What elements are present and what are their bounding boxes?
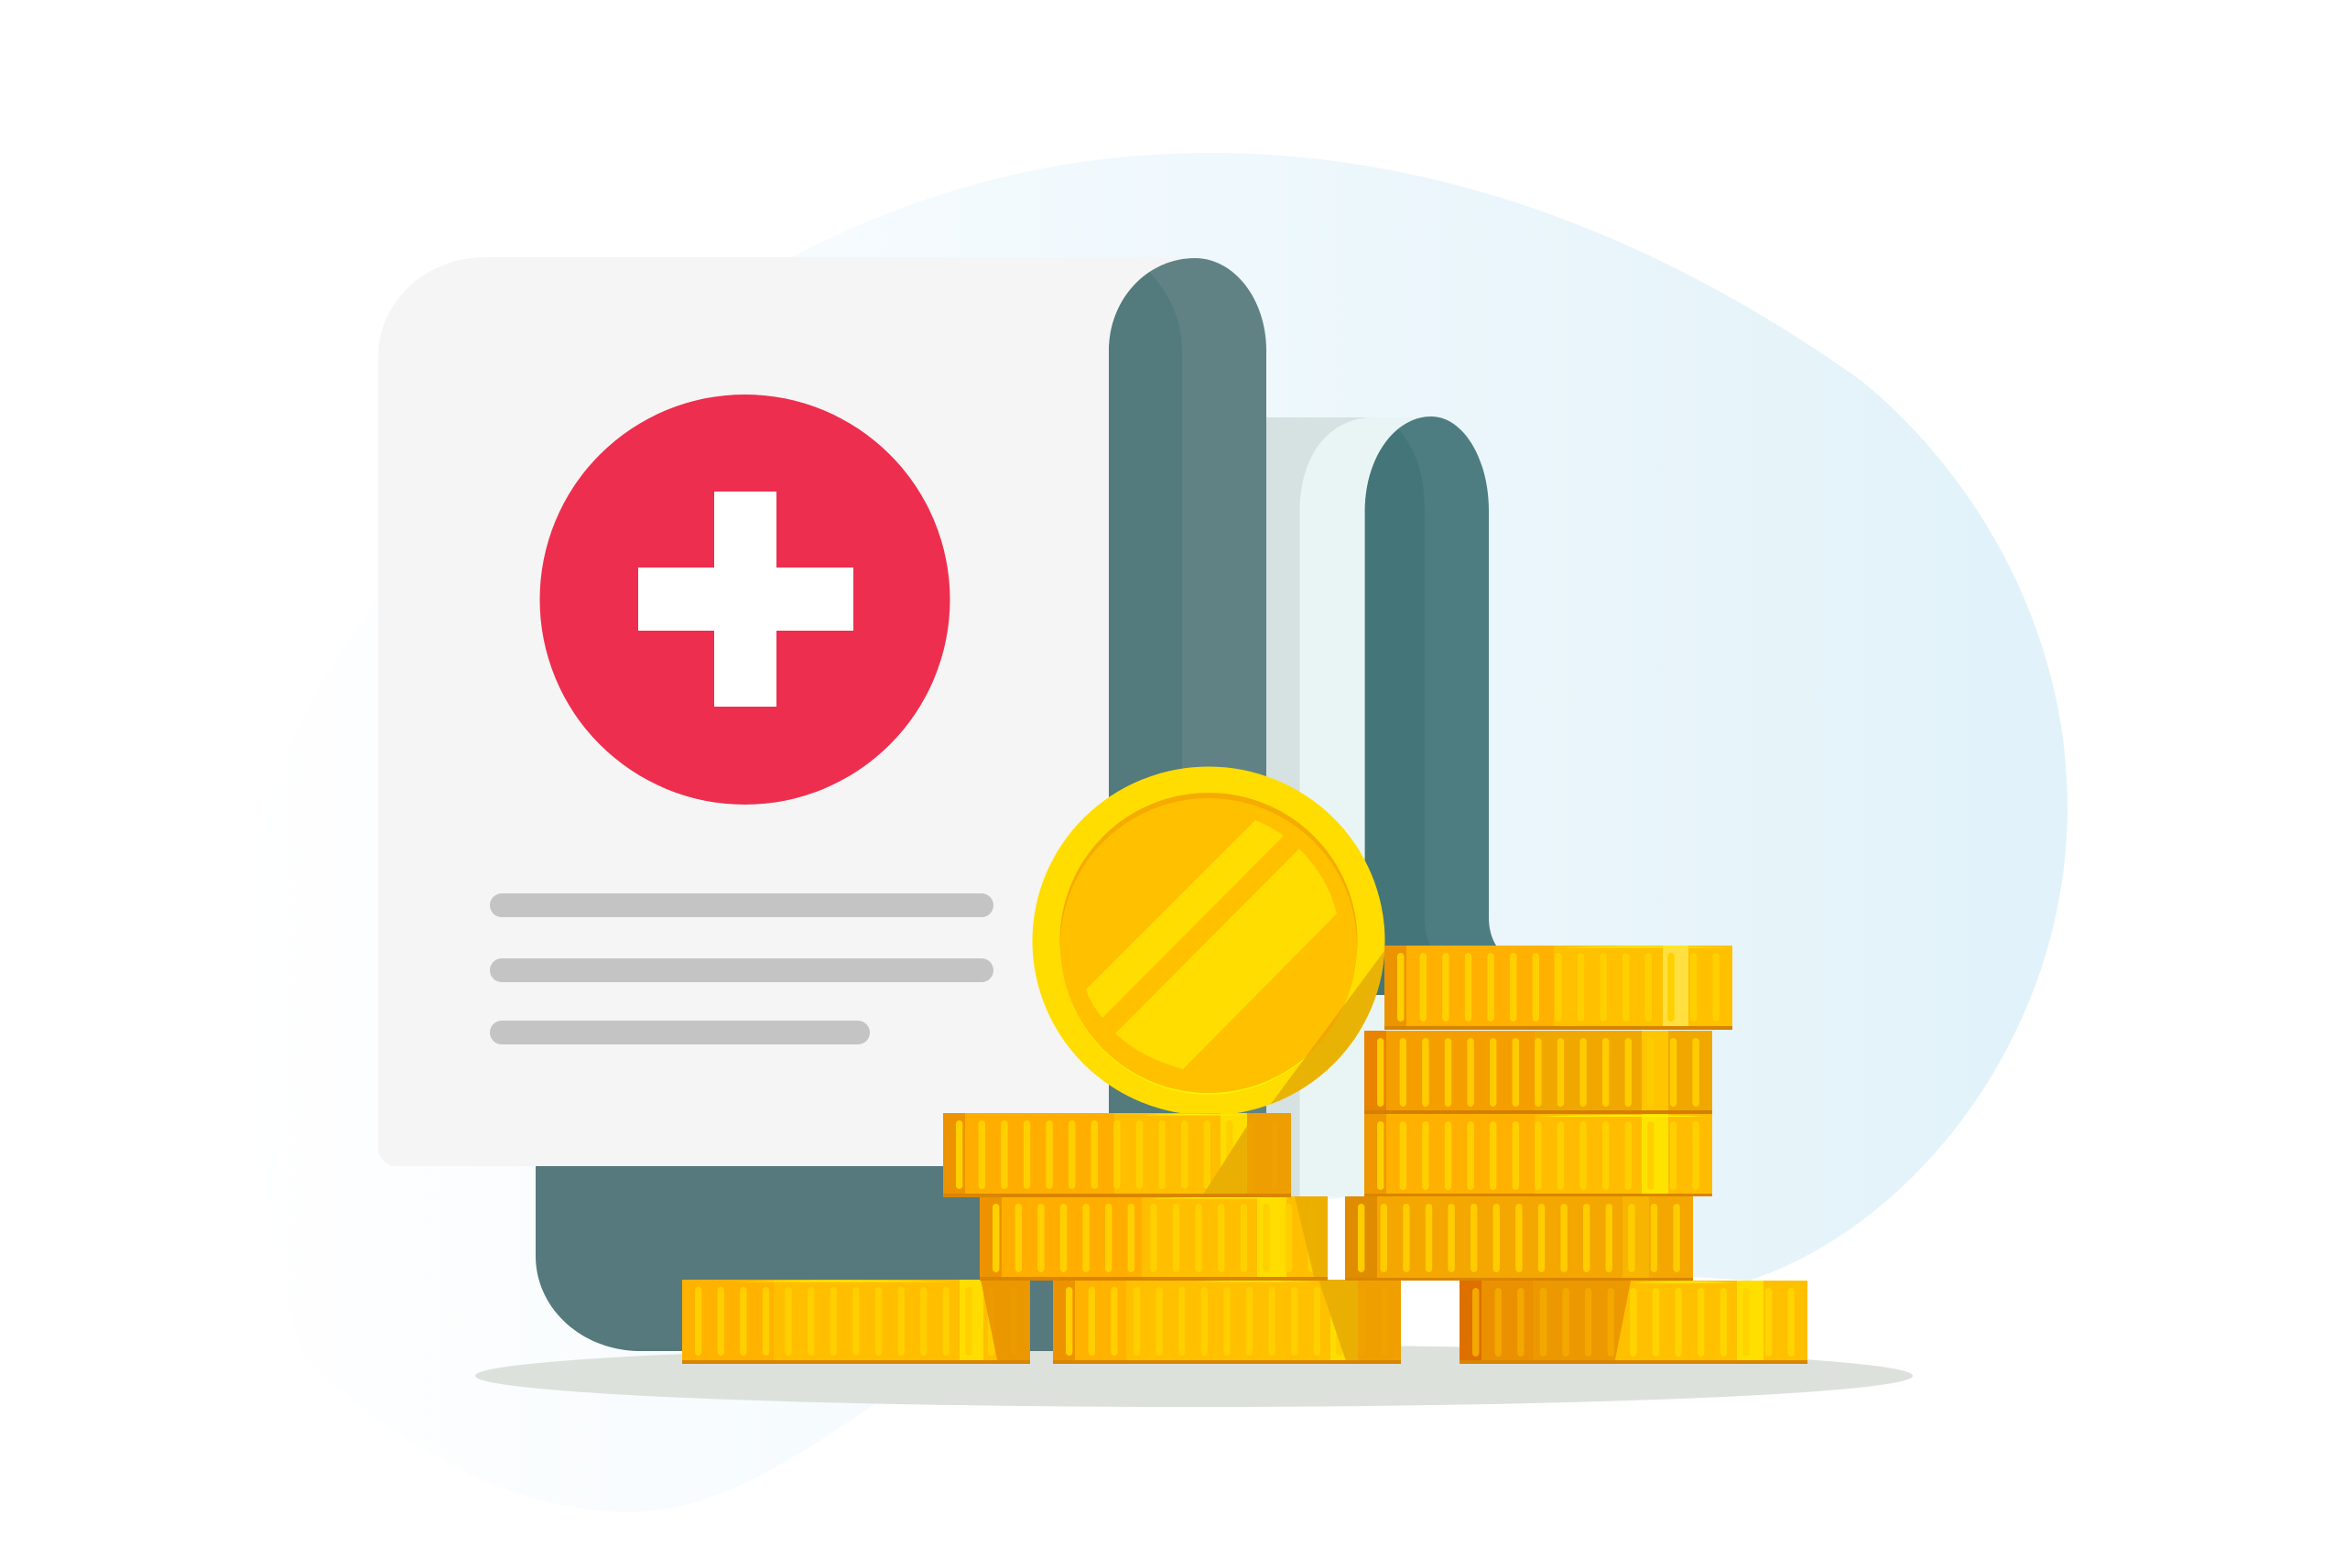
coin stack: bottom right coin: [1460, 1281, 1807, 1364]
coin stack: upper left coin: [943, 1113, 1291, 1197]
icon: medical cross: [540, 395, 950, 805]
coin stack: bottom middle coin: [1053, 1280, 1401, 1364]
second document back sheet: [1266, 417, 1376, 1196]
main document sheet: [378, 257, 1195, 1166]
large upright coin: [1033, 767, 1401, 1126]
coin stack: bottom left coin: [682, 1280, 1030, 1364]
coin stack: lower right-stack coin: [1345, 1196, 1693, 1281]
second document front sheet: [1300, 417, 1438, 1196]
main document teal base: [536, 1098, 1058, 1351]
coin stack: middle left coin: [980, 1196, 1328, 1281]
background blob: [249, 153, 2067, 1512]
coin stack: right-stack third coin: [1364, 1114, 1712, 1196]
text lines: [490, 893, 993, 1044]
ground shadow: [475, 1345, 1913, 1407]
coin stack: right-stack top coin: [1384, 946, 1732, 1030]
second document teal roll: [1364, 416, 1496, 995]
coin stack: right-stack second coin: [1364, 1031, 1712, 1114]
main document teal roll: [1109, 258, 1266, 1113]
second document: [1266, 403, 1498, 1196]
